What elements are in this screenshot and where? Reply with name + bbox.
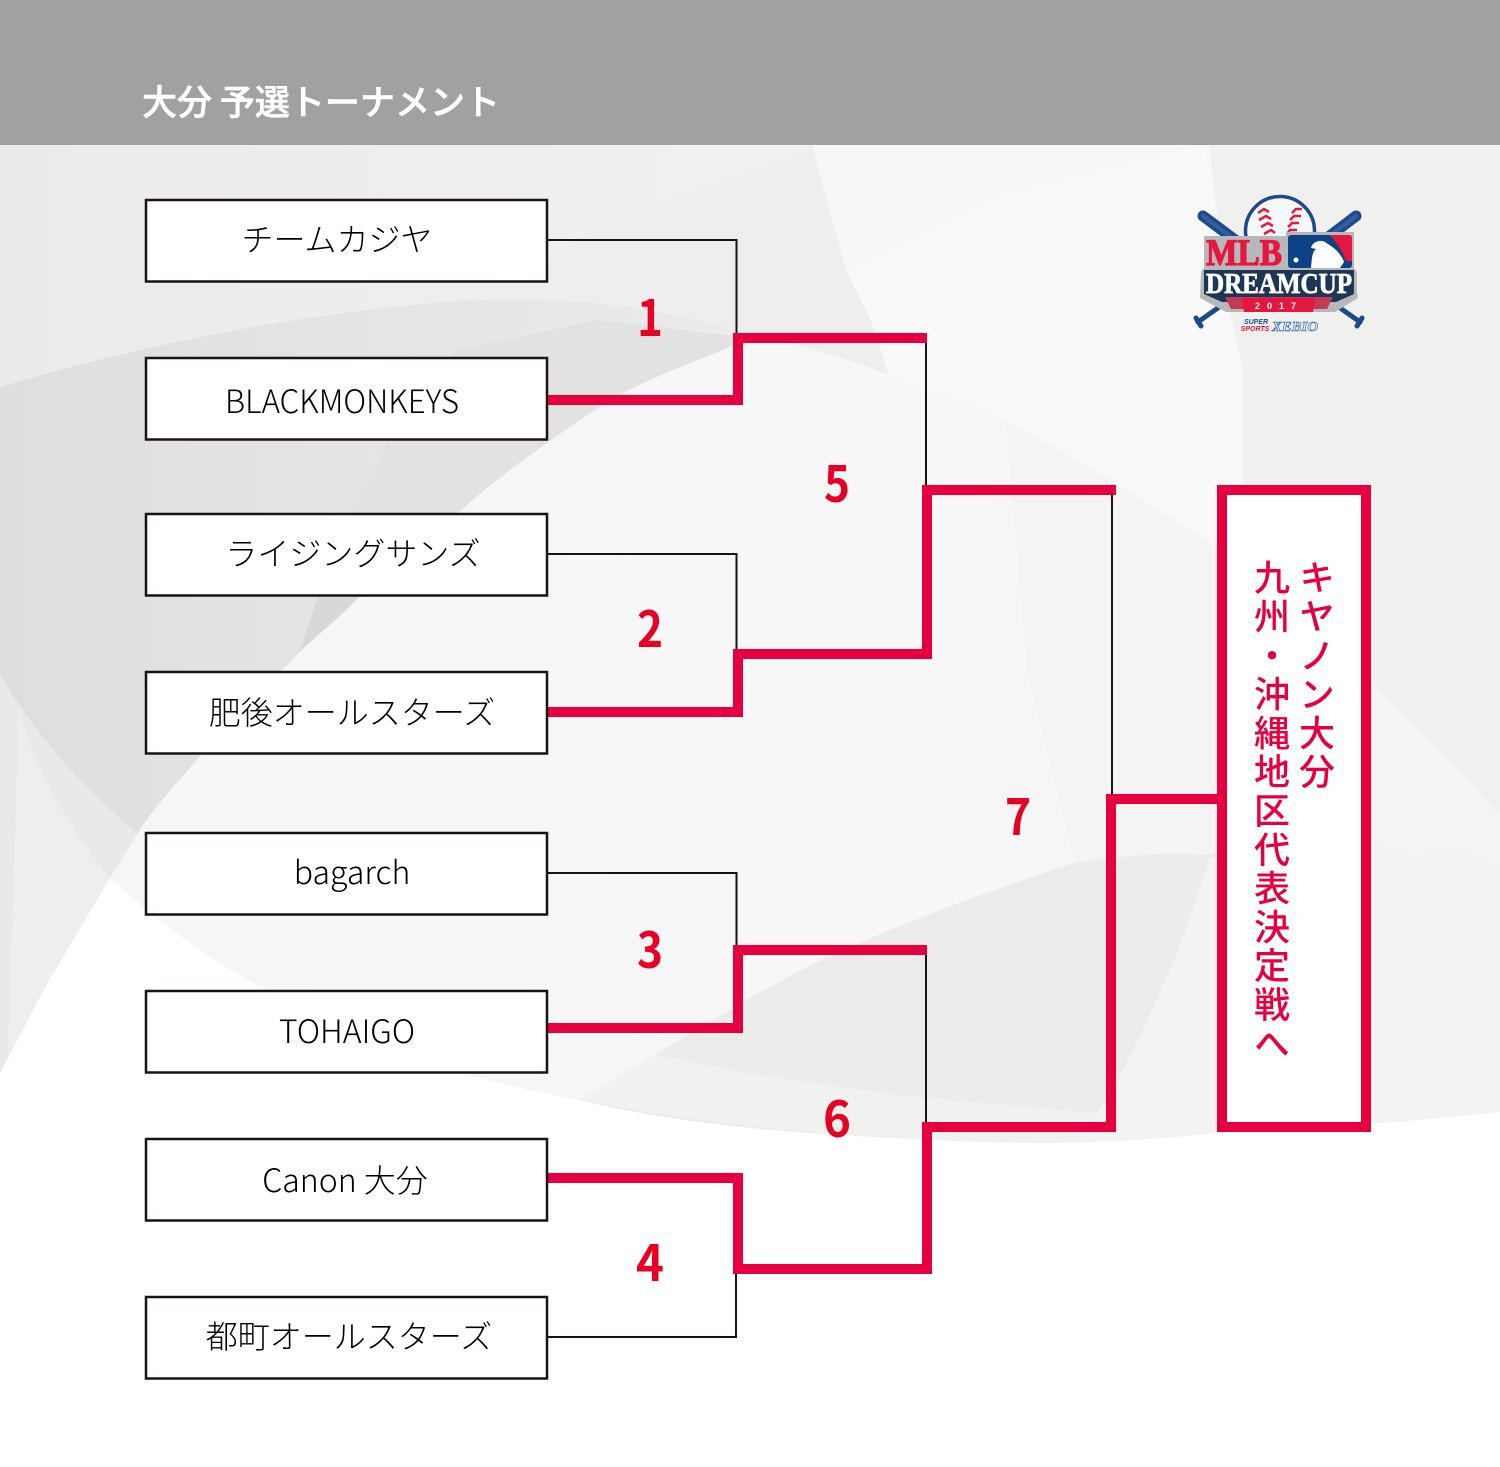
logo: MLB Dreamcup 2017 (1196, 196, 1362, 335)
sponsor: Super Sports Xebio: SUPER (1244, 319, 1268, 326)
match number 4: 4 (636, 1224, 664, 1296)
team box: ライジングサンズ (146, 514, 547, 596)
team box: TOHAIGO: TOHAIGO (279, 1007, 415, 1053)
team box: bagarch: bagarch (294, 848, 410, 894)
team box: bagarch (146, 833, 547, 914)
year ribbon: 2017 (1255, 301, 1303, 311)
icon: MLB batter mark (1288, 235, 1352, 268)
final box text: キヤノン大分: キヤノン大分 (1291, 559, 1343, 792)
team box: BLACKMONKEYS: BLACKMONKEYS (225, 377, 459, 423)
sponsor: Super Sports Xebio: XEBIO (1271, 320, 1318, 335)
header bar (0, 0, 1500, 145)
match number 2: 2 (637, 590, 663, 662)
team box: Canon 大分 (146, 1139, 547, 1220)
team box: 都町オールスターズ (146, 1297, 547, 1378)
final box text: 九州・沖縄地区代表決定戦へ: 九州・沖縄地区代表決定戦へ (1246, 559, 1298, 1063)
logo plate (1200, 232, 1358, 312)
team box: チームカジヤ: チームカジヤ (241, 215, 433, 261)
sponsor: Super Sports Xebio (1241, 319, 1318, 335)
team box: Canon 大分: Canon 大分 (262, 1156, 428, 1202)
winning paths (548, 338, 1222, 1269)
match number 5: 5 (824, 445, 850, 517)
year ribbon (1225, 297, 1333, 312)
icon: baseball (1246, 196, 1314, 266)
bracket connector lines (548, 240, 1112, 1337)
team box: ライジングサンズ: ライジングサンズ (225, 529, 481, 575)
team box: TOHAIGO (146, 991, 547, 1072)
match number 7: 7 (1005, 778, 1031, 850)
sponsor: Super Sports Xebio: SPORTS (1241, 326, 1270, 333)
match number 1: 1 (637, 279, 663, 351)
team box: 都町オールスターズ: 都町オールスターズ (206, 1312, 492, 1358)
team box: 肥後オールスターズ: 肥後オールスターズ (209, 688, 495, 734)
icon: crossed bats (1196, 216, 1362, 326)
team box: 肥後オールスターズ (146, 672, 547, 754)
final destination box (1222, 490, 1366, 1127)
MLB lettering: MLB (1206, 233, 1282, 274)
match number 6: 6 (823, 1080, 851, 1152)
background swirl (0, 145, 1500, 1180)
title: 大分 予選トーナメント (142, 75, 500, 126)
match number 3: 3 (637, 911, 663, 983)
DREAMCUP lettering: DREAMCUP (1206, 269, 1352, 300)
team box: チームカジヤ (146, 200, 547, 282)
team box: BLACKMONKEYS (146, 358, 547, 440)
